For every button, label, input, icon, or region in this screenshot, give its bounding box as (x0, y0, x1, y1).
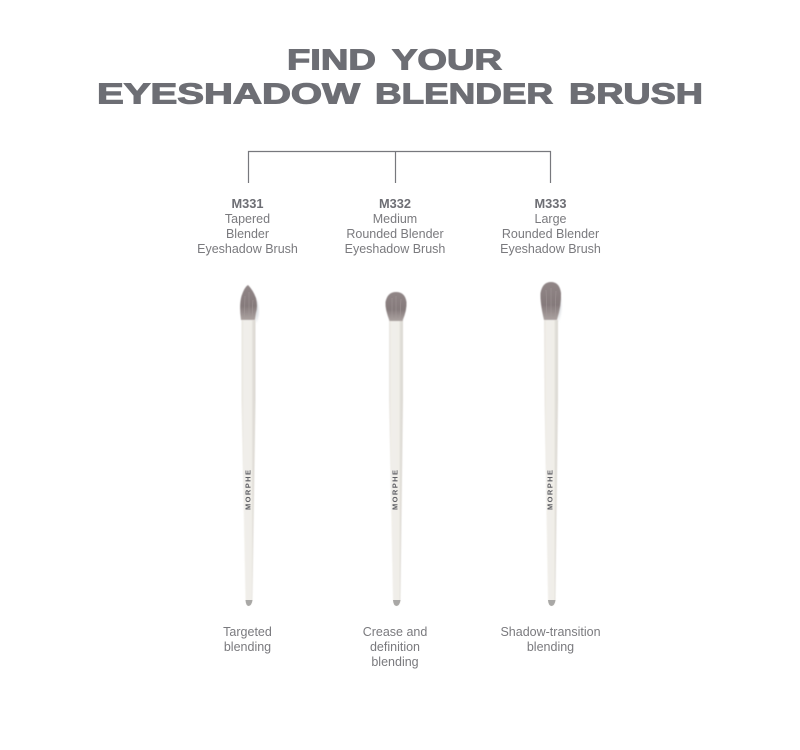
bracket connector (248, 152, 550, 183)
label: M331: M331 (231, 196, 264, 211)
caption: M332: Crease and (363, 625, 427, 639)
caption: M331 (223, 625, 272, 654)
label: M332: Eyeshadow Brush (345, 242, 445, 256)
label: M332: Rounded Blender (346, 227, 444, 241)
label: M332: M332 (379, 196, 411, 211)
label: M333: M333 (534, 196, 567, 211)
brand mark: MORPHE (546, 470, 554, 510)
label: M332: Medium (373, 212, 417, 226)
brand mark: MORPHE (244, 470, 252, 510)
caption: M331: Targeted (223, 625, 272, 639)
title: BRUSH (569, 78, 703, 110)
title: YOUR (392, 44, 502, 76)
brand mark: MORPHE (390, 470, 400, 510)
label: M333: Large (535, 212, 567, 226)
title: BLENDER (375, 78, 553, 110)
label: M331: Eyeshadow Brush (197, 242, 298, 256)
title: EYESHADOW (97, 78, 361, 110)
caption: M333: blending (527, 640, 574, 654)
label: M331 (197, 196, 298, 256)
label: M331: Blender (226, 227, 269, 241)
label: M333 (500, 196, 601, 256)
caption: M331: blending (224, 640, 271, 654)
title: FIND (287, 44, 376, 76)
brush: M333 large rounded (540, 282, 561, 606)
caption: M333: Shadow-transition (500, 625, 601, 639)
caption: M332: definition (370, 640, 420, 654)
caption: M332 (363, 625, 427, 669)
label: M331: Tapered (225, 212, 270, 226)
label: M333: Rounded Blender (502, 227, 599, 241)
label: M333: Eyeshadow Brush (500, 242, 601, 256)
caption: M333 (500, 625, 601, 654)
caption: M332: blending (371, 655, 419, 669)
label: M332 (345, 196, 445, 256)
brush: M332 medium rounded (385, 292, 407, 606)
brush: M331 tapered (240, 285, 258, 606)
title (97, 44, 703, 110)
